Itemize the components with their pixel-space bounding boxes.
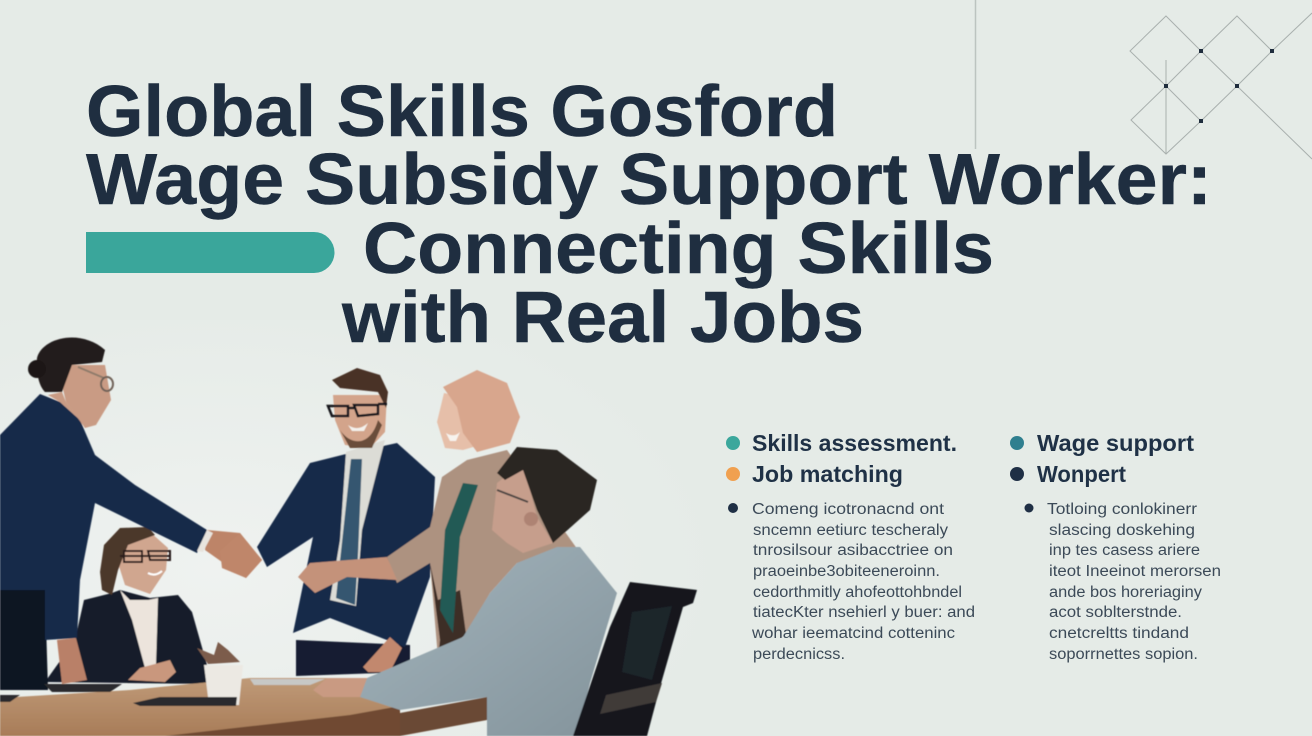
photo: business team shaking hands around a table — [0, 338, 697, 736]
heading: skills assessment: Skills assessment. — [752, 430, 957, 456]
office chair — [573, 582, 697, 736]
bullet: right body text — [1024, 504, 1034, 512]
table right edge — [400, 697, 487, 736]
title — [86, 72, 1212, 358]
bullet: left body text — [728, 503, 738, 513]
body text: left column: wohar ieematcind cotteninc — [751, 625, 955, 642]
body text: right column: inp tes casess ariere — [1049, 542, 1200, 559]
body text: left column: sncemn eetiurc tescheraly — [753, 522, 948, 539]
body text: right column: Totloing conlokinerr — [1047, 501, 1197, 518]
heading: job matching: Job matching — [752, 461, 903, 487]
bullet: wage support — [1010, 436, 1024, 450]
body text: right column: iteot Ineeinot merorsen — [1049, 563, 1221, 580]
body text: left column: cedorthmitly ahofeottohbndel — [753, 584, 962, 601]
body text: left column: Comeng icotronacnd ont — [752, 501, 945, 518]
table — [0, 678, 400, 736]
man in navy suit and tie — [220, 368, 435, 676]
body text: left column: perdecnicss. — [753, 646, 845, 663]
seated man in grey jacket — [313, 447, 617, 736]
documents and tablets on table — [0, 679, 325, 706]
blonde woman in beige blazer — [298, 370, 590, 658]
decorative vertical line — [974, 0, 976, 149]
title: Wage Subsidy Support Worker: — [86, 140, 1212, 220]
title: Connecting Skills — [363, 209, 994, 289]
bullet: wonpert — [1010, 467, 1024, 481]
bullet: skills assessment — [726, 436, 740, 450]
body text: right column — [1047, 501, 1221, 663]
body text: left column: praoeinbe3obiteeneroinn. — [753, 563, 940, 580]
body text: right column: acot soblterstnde. — [1049, 604, 1182, 621]
teal accent bar — [86, 232, 334, 273]
seated woman with glasses — [45, 527, 207, 684]
bullet: job matching — [726, 467, 740, 481]
chair mesh highlights — [622, 606, 672, 680]
body text: left column — [751, 501, 975, 663]
plant pot — [197, 642, 243, 705]
geometric diamond network — [1130, 13, 1312, 159]
body text: left column: tnrosilsour asibacctriee on — [753, 542, 953, 559]
table edge — [165, 706, 400, 736]
body text: right column: cnetcreltts tindand — [1049, 625, 1189, 642]
title: Global Skills Gosford — [86, 72, 838, 152]
heading: wage support: Wage support — [1037, 430, 1194, 456]
body text: right column: soporrnettes sopion. — [1049, 646, 1198, 663]
body text: right column: slascing doskehing — [1049, 522, 1195, 539]
body text: left column: tiatecKter nsehierl y buer: and — [753, 604, 975, 621]
chair lower band — [600, 683, 662, 714]
heading: wonpert: Wonpert — [1037, 461, 1126, 487]
panel: left feature list — [726, 430, 975, 663]
body text: right column: ande bos horeriaginy — [1049, 584, 1202, 601]
title: with Real Jobs — [341, 278, 864, 358]
panel: right feature list — [1010, 430, 1221, 663]
standing woman in navy suit — [0, 338, 262, 690]
